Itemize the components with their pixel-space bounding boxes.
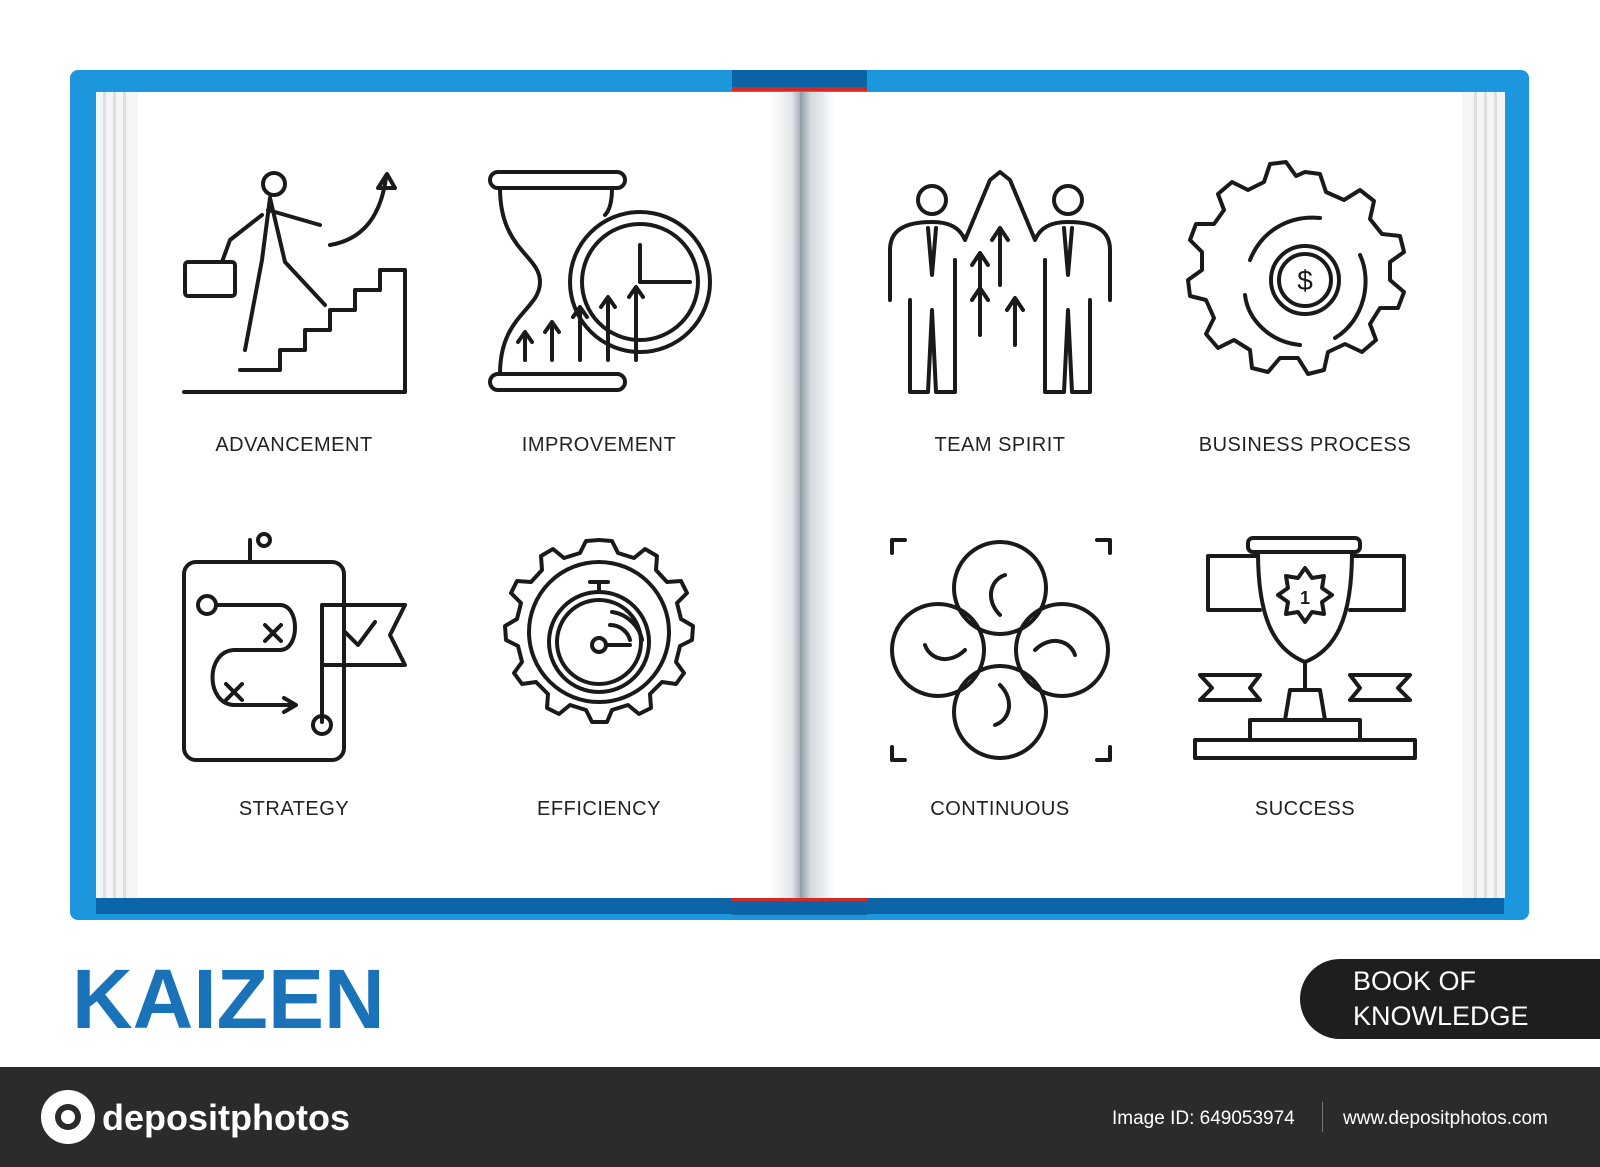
footer bar: depositphotos — [102, 1097, 350, 1138]
label: efficiency: EFFICIENCY — [537, 798, 661, 820]
badge: book of knowledge — [1300, 959, 1600, 1039]
label: strategy: STRATEGY — [239, 798, 349, 820]
label: improvement: IMPROVEMENT — [522, 434, 676, 456]
icon: success — [1195, 538, 1415, 758]
title: KAIZEN — [72, 952, 385, 1046]
page edges — [96, 92, 1505, 898]
icon: continuous — [892, 540, 1110, 760]
right page — [800, 92, 1462, 898]
text: 1 — [1300, 588, 1310, 608]
badge: book of knowledge: KNOWLEDGE — [1353, 1001, 1529, 1031]
left page — [138, 92, 801, 898]
labels — [215, 434, 1411, 820]
icon: team spirit — [890, 172, 1110, 392]
label: team spirit: TEAM SPIRIT — [934, 434, 1066, 456]
label: continuous: CONTINUOUS — [930, 798, 1070, 820]
icon: efficiency — [505, 540, 693, 722]
icon: business process — [1188, 162, 1404, 374]
badge: book of knowledge: BOOK OF — [1353, 966, 1476, 996]
label: business process: BUSINESS PROCESS — [1199, 434, 1411, 456]
footer bar — [0, 1067, 1600, 1167]
label: advancement: ADVANCEMENT — [215, 434, 373, 456]
icon: strategy — [184, 534, 405, 760]
text: $ — [1297, 265, 1313, 296]
icon: improvement — [490, 172, 710, 390]
book cover — [70, 70, 1529, 920]
icon: advancement — [184, 173, 405, 392]
footer bar: www.depositphotos.com — [1342, 1108, 1548, 1129]
footer bar: Image ID: 649053974 — [1112, 1108, 1295, 1129]
label: success: SUCCESS — [1255, 798, 1355, 820]
